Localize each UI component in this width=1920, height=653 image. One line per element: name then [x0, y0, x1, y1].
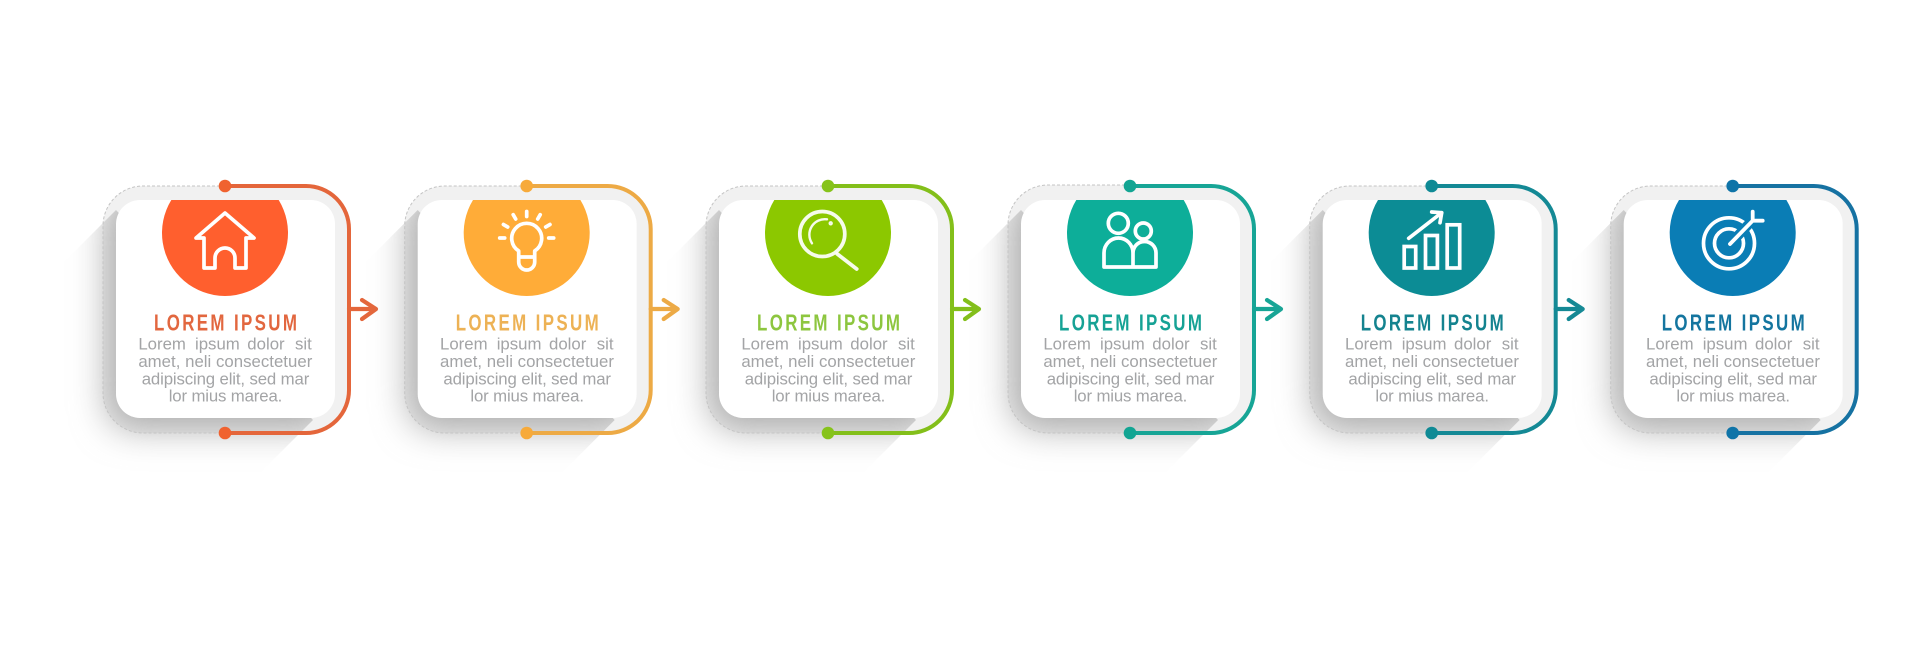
bottom dot: [822, 427, 834, 439]
arrow: [1556, 300, 1583, 319]
body text: adipiscing elit, sed mar: [1649, 370, 1817, 388]
long shadow: [410, 195, 633, 428]
heading: LOREM IPSUM: [154, 310, 297, 336]
card: [1021, 200, 1240, 418]
backing panel: [706, 186, 952, 433]
body text: dolor: [1755, 334, 1793, 354]
body text: amet, neli consectetuer: [440, 352, 614, 371]
card: [1624, 200, 1843, 418]
arrow: [651, 300, 678, 319]
long shadow: [711, 195, 934, 428]
heading: LOREM IPSUM: [1662, 310, 1805, 336]
body text: amet, neli consectetuer: [1646, 352, 1820, 371]
icon circle: [464, 200, 590, 296]
step 2: idea: [405, 180, 678, 439]
body text: adipiscing elit, sed mar: [142, 370, 310, 388]
body text: amet, neli consectetuer: [1043, 352, 1218, 371]
long shadow: [1315, 195, 1538, 428]
bottom dot: [219, 427, 231, 439]
step 5: growth chart: [1310, 180, 1583, 439]
icon: target: [1704, 212, 1763, 269]
backing panel: [405, 186, 651, 433]
body text: Lorem: [1345, 334, 1393, 354]
body text: sit: [1803, 334, 1820, 354]
long shadow: [1616, 195, 1839, 428]
step 1: home: [103, 180, 376, 439]
icon circle: [1369, 200, 1495, 296]
icon: people: [1104, 213, 1156, 267]
bottom dot: [1425, 427, 1438, 439]
connector line: [828, 186, 952, 433]
body text: dolor: [1454, 334, 1492, 354]
body text: ipsum: [497, 334, 541, 354]
body text: amet, neli consectetuer: [138, 352, 313, 371]
icon: bar chart with arrow: [1404, 212, 1460, 268]
body text: dolor: [549, 334, 587, 354]
long shadow: [1013, 195, 1236, 428]
body text: adipiscing elit, sed mar: [1348, 370, 1516, 388]
step 3: search: [706, 180, 979, 439]
body text: lor mius marea.: [1074, 386, 1187, 406]
body text: lor mius marea.: [1375, 386, 1489, 406]
card: [418, 200, 637, 418]
body text: sit: [898, 334, 915, 354]
body text: dolor: [1152, 334, 1190, 354]
body text: adipiscing elit, sed mar: [745, 370, 913, 388]
body text: Lorem: [741, 334, 789, 354]
body text: sit: [1502, 334, 1519, 354]
heading: LOREM IPSUM: [456, 310, 599, 336]
body text: dolor: [247, 334, 285, 354]
icon: light bulb: [500, 212, 554, 270]
arrow: [1254, 300, 1281, 319]
body text: ipsum: [1402, 334, 1446, 354]
body text: ipsum: [1703, 334, 1747, 354]
body text: Lorem: [440, 334, 488, 354]
arrow: [952, 300, 979, 319]
body text: Lorem: [1043, 334, 1091, 354]
top dot: [219, 180, 231, 192]
card: [1323, 200, 1542, 418]
body text: ipsum: [195, 334, 240, 354]
icon circle: [765, 200, 891, 296]
heading: LOREM IPSUM: [1059, 310, 1202, 336]
body text: ipsum: [798, 334, 843, 354]
icon circle: [1670, 200, 1796, 296]
body text: sit: [295, 334, 312, 354]
step 6: target: [1611, 180, 1857, 439]
bottom dot: [520, 427, 533, 439]
backing panel: [1310, 186, 1556, 433]
body text: [440, 334, 614, 406]
body text: Lorem: [138, 334, 186, 354]
card: [116, 200, 335, 418]
body text: [741, 334, 916, 406]
bottom dot: [1726, 427, 1739, 439]
connector line: [1130, 186, 1254, 433]
step 4: people: [1008, 180, 1281, 439]
heading: LOREM IPSUM: [757, 310, 900, 336]
body text: amet, neli consectetuer: [1345, 352, 1519, 371]
body text: lor mius marea.: [169, 386, 282, 406]
connector line: [225, 186, 349, 433]
body text: amet, neli consectetuer: [741, 352, 916, 371]
connector line: [1733, 186, 1857, 433]
body text: dolor: [850, 334, 888, 354]
body text: [1345, 334, 1519, 406]
top dot: [1124, 180, 1136, 192]
body text: Lorem: [1646, 334, 1694, 354]
icon circle: [1067, 200, 1193, 296]
body text: adipiscing elit, sed mar: [1047, 370, 1215, 388]
backing panel: [103, 186, 349, 433]
heading: LOREM IPSUM: [1361, 310, 1504, 336]
body text: [1043, 334, 1218, 406]
connector line: [527, 186, 651, 433]
card: [719, 200, 938, 418]
body text: sit: [1200, 334, 1217, 354]
icon circle: [162, 200, 288, 296]
top dot: [822, 180, 834, 192]
icon: house: [196, 213, 254, 268]
body text: lor mius marea.: [470, 386, 584, 406]
body text: sit: [597, 334, 614, 354]
body text: adipiscing elit, sed mar: [443, 370, 611, 388]
long shadow: [108, 195, 331, 428]
top dot: [520, 180, 533, 192]
top dot: [1726, 180, 1739, 192]
connector line: [1432, 186, 1556, 433]
body text: [1646, 334, 1820, 406]
backing panel: [1008, 185, 1254, 433]
body text: lor mius marea.: [772, 386, 885, 406]
body text: ipsum: [1100, 334, 1145, 354]
top dot: [1425, 180, 1438, 192]
arrow: [349, 300, 376, 319]
bottom dot: [1124, 427, 1136, 439]
icon: magnifier: [800, 212, 857, 269]
backing panel: [1611, 186, 1857, 433]
body text: lor mius marea.: [1676, 386, 1790, 406]
body text: [138, 334, 313, 406]
